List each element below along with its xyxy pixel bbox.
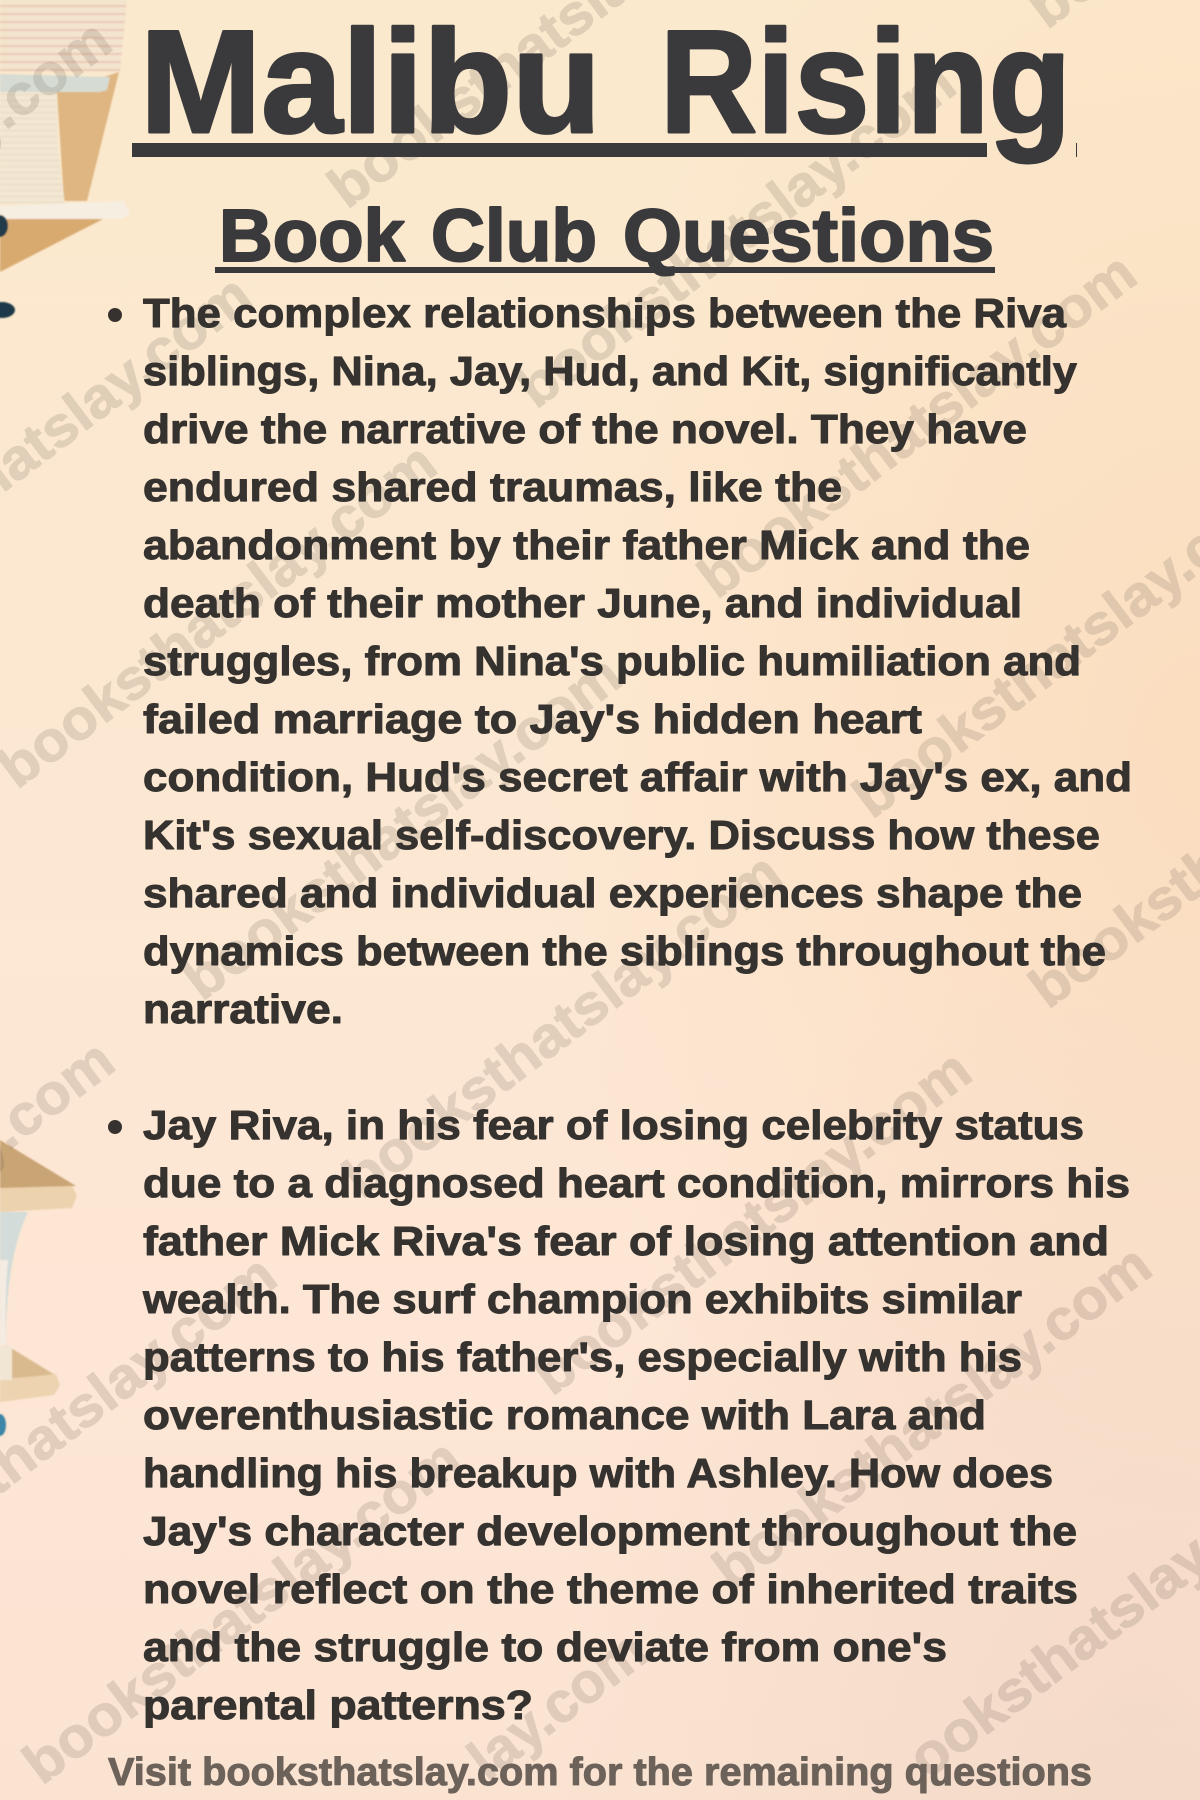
question 1 bullet text: drive the narrative of the novel. They have [143,406,1027,452]
question 2 bullet text: due to a diagnosed heart condition, mirrors his [143,1160,1130,1206]
title: Malibu Rising: Malibu [140,0,601,163]
footer: visit website: Visit booksthatslay.com for the remaining questions [108,1751,1092,1794]
question 2 bullet text: overenthusiastic romance with Lara and [143,1392,986,1438]
subtitle: Book Club Questions: Questions [623,194,994,277]
question 1 bullet text: Kit's sexual self-discovery. Discuss how these [143,812,1100,858]
question 1 bullet text: condition, Hud's secret affair with Jay's ex, and [143,754,1132,800]
question 1 bullet text: dynamics between the siblings throughout the [143,928,1106,974]
question 2 bullet text: father Mick Riva's fear of losing attention and [143,1218,1109,1264]
watermarks: booksthatslay.com: booksthatslay.com [701,1232,1163,1602]
subtitle: Book Club Questions: Book [219,194,406,277]
question 2 bullet text: Jay's character development throughout the [143,1508,1077,1554]
watermarks: booksthatslay.com: booksthatslay.com [686,240,1148,610]
question 1 bullet text: struggles, from Nina's public humiliation and [143,638,1081,684]
image: stack of books top left [0,0,130,318]
question 2 bullet text: wealth. The surf champion exhibits similar [142,1276,1022,1322]
watermarks: booksthatslay.com: booksthatslay.com [331,840,793,1210]
bullet dot [108,308,122,322]
watermarks: booksthatslay.com: booksthatslay.com [171,642,633,1012]
question 1 bullet text: siblings, Nina, Jay, Hud, and Kit, significantly [143,348,1077,394]
question 2 bullet text: parental patterns? [143,1682,533,1728]
question 2 bullet text [108,1102,1130,1728]
bullet dot [108,1120,122,1134]
question 1 bullet text: endured shared traumas, like the [143,464,842,510]
subtitle: Book Club Questions: Club [431,194,597,277]
subtitle: Book Club Questions [215,194,995,277]
question 2 bullet text: Jay Riva, in his fear of losing celebrity status [143,1102,1084,1148]
watermarks: booksthatslay.com: lay.com [456,1618,659,1792]
watermarks: booksthatslay.com: booksthatslay.com [521,1037,983,1407]
question 1 bullet text: The complex relationships between the Riva [143,290,1067,336]
question 2 bullet text: handling his breakup with Ashley. How does [143,1450,1053,1496]
question 1 bullet text: narrative. [143,986,343,1032]
watermarks: booksthatslay.com: booksthatslay.com [505,50,967,420]
watermarks: booksthatslay.com: booksthatslay.com [11,1426,473,1796]
image: stack of books lower left [0,1140,77,1436]
question 2 bullet text: patterns to his father's, especially with his [143,1334,1022,1380]
title: Malibu Rising [132,0,1077,163]
question 1 bullet text: death of their mother June, and individual [143,580,1022,626]
question 1 bullet text: failed marriage to Jay's hidden heart [143,696,922,742]
question 1 bullet text [108,290,1132,1032]
question 1 bullet text: abandonment by their father Mick and the [143,522,1030,568]
question 2 bullet text: and the struggle to deviate from one's [143,1624,947,1670]
title: Malibu Rising: Rising [660,0,1071,163]
question 1 bullet text: shared and individual experiences shape the [143,870,1082,916]
question 2 bullet text: novel reflect on the theme of inherited traits [143,1566,1078,1612]
